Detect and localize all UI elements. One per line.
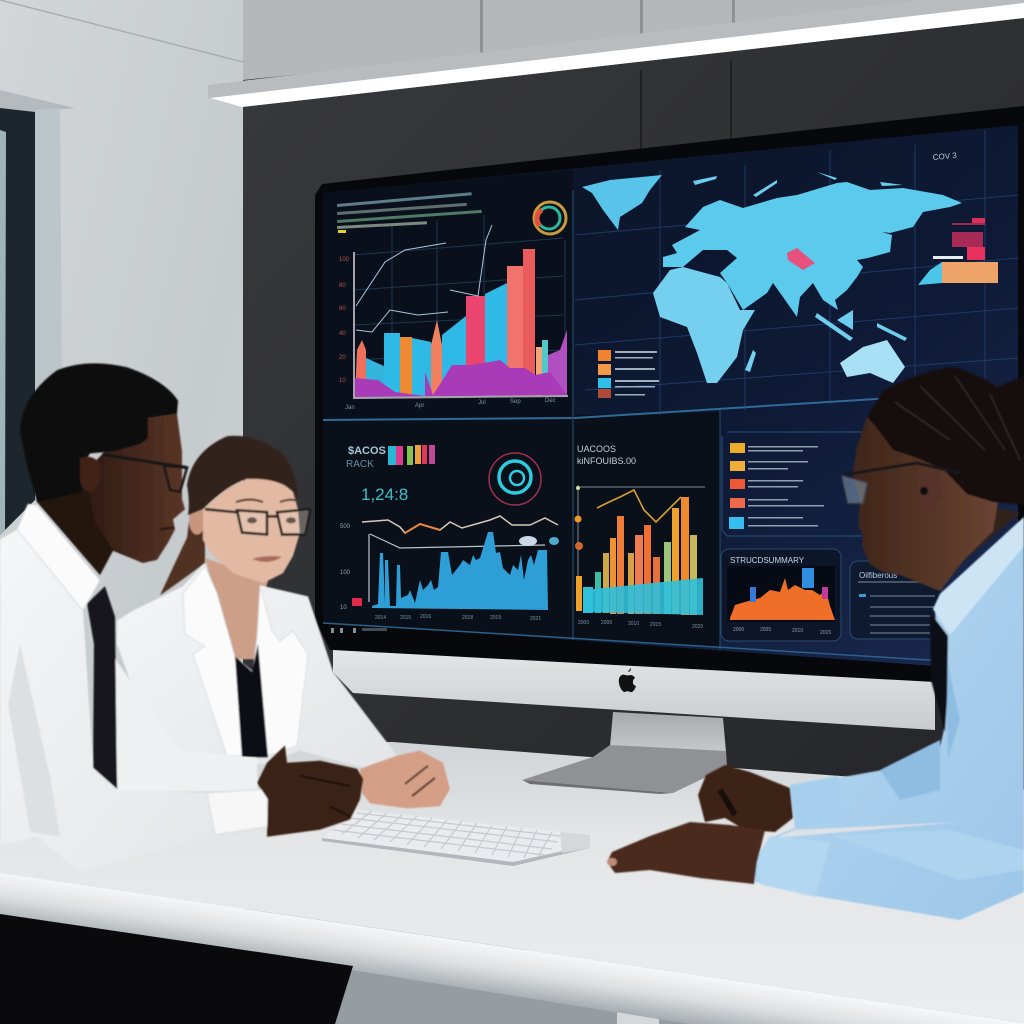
bottom taskbar <box>331 628 387 633</box>
screen bottom edge <box>323 623 1010 665</box>
axis <box>578 485 705 610</box>
bars <box>576 497 703 615</box>
shirt <box>0 529 268 872</box>
axis labels: 100 <box>339 257 350 263</box>
blazer <box>117 563 397 768</box>
person: woman <box>117 436 450 808</box>
ear <box>189 506 205 535</box>
top-left chart panel: Jul <box>478 400 486 406</box>
mouth <box>160 527 174 529</box>
dark lower panel backing <box>323 412 720 648</box>
tick labels <box>578 620 703 630</box>
top-left chart panel: Sep <box>510 399 521 405</box>
screen surface <box>323 125 1018 666</box>
tick labels <box>375 614 541 622</box>
small orange chart card: 2005 <box>760 627 771 633</box>
collar <box>17 504 100 611</box>
panel heading: $ACOS <box>348 445 386 457</box>
floor <box>330 950 1024 1024</box>
top-left chart panel: Dec <box>545 398 556 404</box>
axis labels: 10 <box>339 378 346 384</box>
neck <box>900 490 1020 591</box>
cuff <box>207 789 268 835</box>
map: Africa <box>653 267 755 383</box>
neck <box>37 462 148 575</box>
heading colour chips <box>388 445 435 465</box>
keyboard <box>322 810 590 866</box>
axis labels: 60 <box>339 306 346 312</box>
panel heading: kiNFOUIBS.00 <box>577 456 636 466</box>
axis <box>354 252 568 398</box>
purple layer <box>355 360 567 397</box>
ponytail <box>160 497 205 595</box>
panel heading <box>346 445 386 470</box>
tick labels: 2018 <box>462 615 473 621</box>
lower-left panel: line and bars: 500 <box>340 524 351 530</box>
map: Australia <box>840 340 905 383</box>
collar <box>933 517 1024 635</box>
tick labels: 2014 <box>375 615 386 621</box>
map top label: COV 3 <box>932 151 958 162</box>
axis labels <box>339 257 350 384</box>
top-left chart panel <box>337 192 568 411</box>
hand <box>257 745 363 837</box>
map: Greenland <box>582 175 662 230</box>
small slider card: Oilfiberous <box>859 571 897 580</box>
blazer right lapel <box>253 586 308 756</box>
monitor chin with logo <box>333 650 935 730</box>
ceiling light strip <box>208 0 1024 107</box>
bubble <box>519 536 559 546</box>
big number: 1,24:8 <box>361 485 408 504</box>
red marker <box>352 598 362 606</box>
glasses <box>102 454 187 492</box>
lower hand <box>607 822 765 884</box>
wavy line <box>362 516 558 533</box>
small slider card <box>850 561 942 639</box>
divider lines <box>323 390 1018 420</box>
upper hand <box>698 765 793 832</box>
monitor bezel <box>315 106 1024 684</box>
lower-right legend panel <box>722 432 862 536</box>
trend line <box>356 225 492 332</box>
black top <box>235 644 268 758</box>
panel heading: UACOOS <box>577 444 616 454</box>
small orange chart card: STRUCDSUMMARY <box>730 556 805 565</box>
tick labels: 2005 <box>601 620 612 626</box>
axis labels: 40 <box>339 331 346 337</box>
top-left chart panel: Jan <box>345 405 355 411</box>
dark upper panel backing <box>323 170 573 420</box>
axis labels: 80 <box>339 283 346 289</box>
tick labels: 2020 <box>692 624 703 630</box>
lower cuff <box>755 836 830 897</box>
hair <box>20 363 178 502</box>
sleeve folds <box>880 650 960 800</box>
lower-left panel: line and bars: 10 <box>340 605 347 611</box>
tick labels: 2015 <box>400 615 411 621</box>
tick labels: 2021 <box>530 616 541 622</box>
eyes <box>247 517 296 523</box>
lower-left panel: line and bars <box>331 445 559 633</box>
sleeve shading <box>8 644 60 837</box>
neck <box>205 558 268 659</box>
person: right man <box>607 367 1024 920</box>
table gap between sleeves <box>775 822 960 838</box>
map: highlight region <box>787 248 815 270</box>
necktie <box>930 612 948 732</box>
trousers <box>0 914 353 1024</box>
radial gauge <box>489 453 541 505</box>
axis markers <box>574 486 583 550</box>
world map panel <box>575 130 1018 415</box>
monitor <box>315 106 1024 730</box>
glasses <box>842 463 960 503</box>
ear <box>80 457 101 492</box>
top right stacked bars <box>918 218 998 285</box>
axis labels: 20 <box>339 355 346 361</box>
glasses <box>205 509 310 535</box>
hair <box>187 436 298 515</box>
small orange chart card: 2015 <box>820 630 831 636</box>
monitor stand <box>522 712 727 794</box>
dark back wall <box>243 0 1024 800</box>
shirt sleeve far arm <box>112 654 257 791</box>
upper cuff <box>790 776 842 828</box>
map: Eurasia <box>663 182 962 317</box>
left wall <box>0 0 245 1024</box>
ear <box>917 470 943 511</box>
header lines <box>337 192 482 233</box>
lower-left panel: line and bars: 100 <box>340 570 351 576</box>
small orange chart card <box>721 549 841 641</box>
small orange chart card: 2000 <box>733 627 744 633</box>
tick labels: 2019 <box>490 615 501 621</box>
necktie <box>87 586 117 789</box>
trend line <box>597 490 681 522</box>
panel heading: RACK <box>346 459 374 470</box>
tick labels: 2000 <box>578 620 589 626</box>
face <box>852 417 1000 591</box>
map: Madagascar <box>745 350 756 372</box>
hair <box>867 367 1024 505</box>
bars <box>355 249 567 397</box>
tick labels: 2016 <box>420 614 431 620</box>
donut gauge <box>534 202 566 234</box>
table <box>0 742 1024 1024</box>
tick labels: 2010 <box>628 621 639 627</box>
eyebrows <box>236 500 299 502</box>
small orange chart card: 2010 <box>792 628 803 634</box>
hands <box>360 751 450 808</box>
tick labels: 2015 <box>650 622 661 628</box>
shirt <box>755 517 1024 920</box>
cyan bars <box>372 532 548 610</box>
axis <box>369 534 545 602</box>
person: left man <box>0 363 363 872</box>
face <box>85 414 185 563</box>
top-left chart panel: Apr <box>415 403 424 409</box>
blazer left lapel <box>183 566 245 756</box>
map: islands <box>693 172 907 341</box>
panel heading <box>577 444 636 466</box>
map legend <box>598 350 659 398</box>
face <box>203 479 300 583</box>
lower-middle panel: orange and teal bars <box>574 444 705 630</box>
lips <box>252 556 282 562</box>
earbud <box>920 487 928 495</box>
